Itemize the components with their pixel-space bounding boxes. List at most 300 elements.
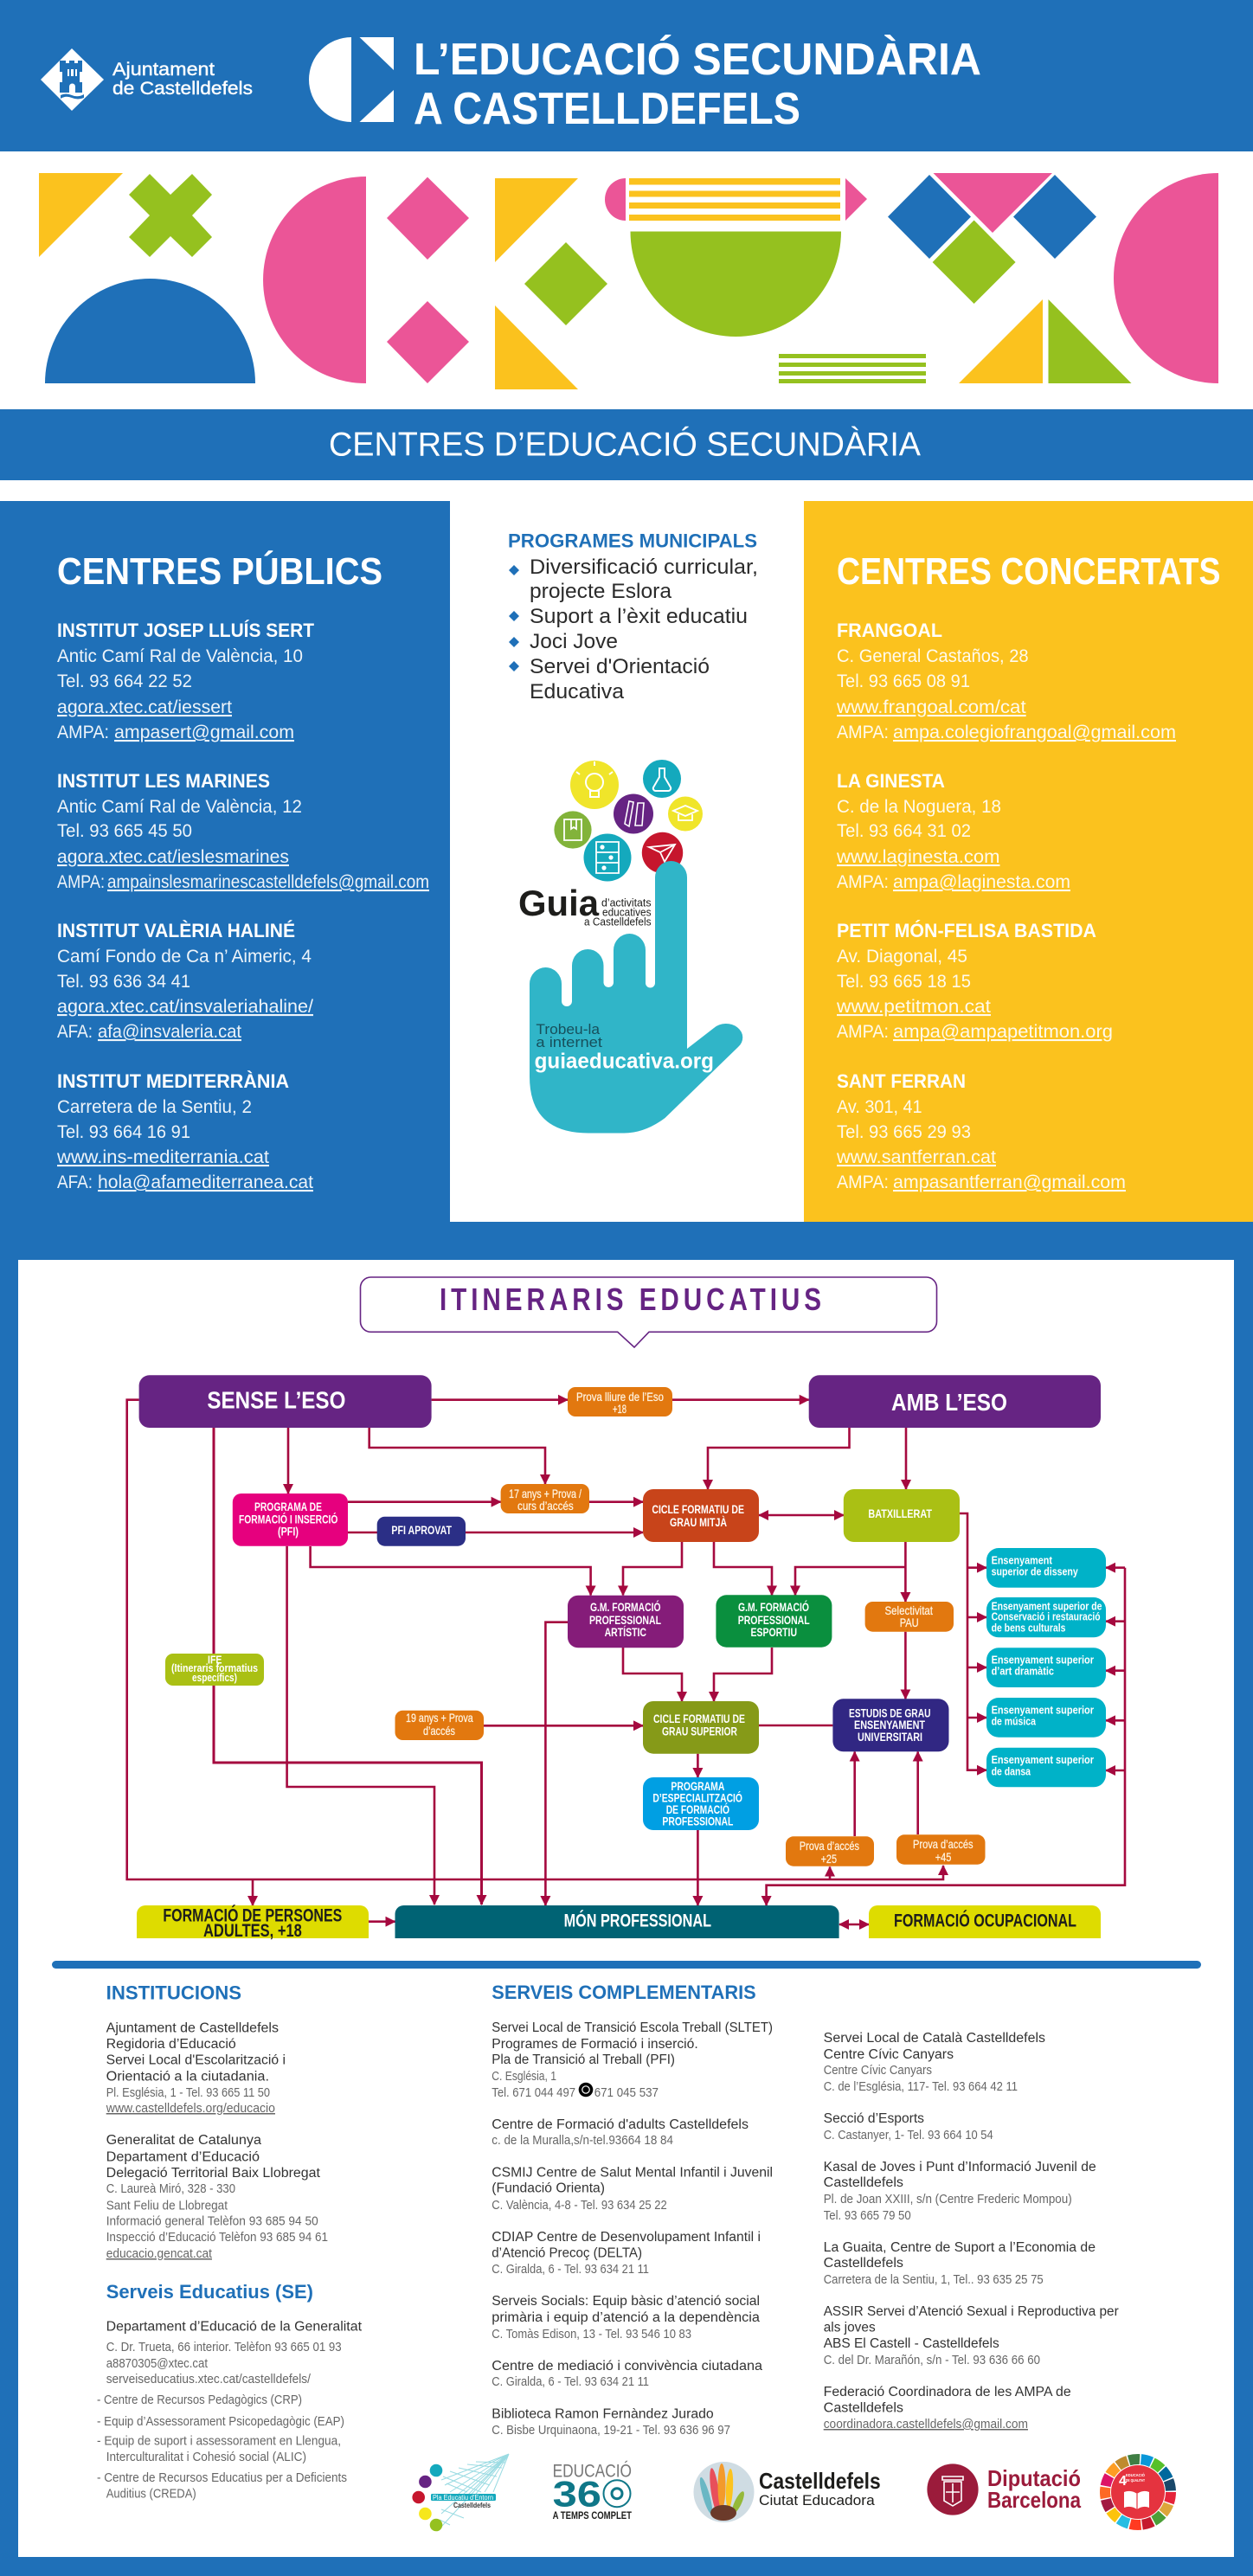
box: 19 anys + prova <box>395 1711 484 1740</box>
list of programmes: Educativa <box>530 680 625 703</box>
contact: Departament d'Educació de la Generalitat: serveiseducatius.xtec.cat/castelldefels/ <box>106 2372 312 2386</box>
service: federació AMPA: Castelldefels <box>824 2401 903 2416</box>
box: selectivitat PAU <box>865 1602 954 1632</box>
box: sense l'ESO <box>139 1375 432 1428</box>
school: Institut Josep Lluís Sert: agora.xtec.cat/iessert <box>57 697 232 717</box>
arrow: món professional and formació ocupacional <box>839 1924 869 1925</box>
service: kasal de joves <box>824 2160 1096 2223</box>
arrow: to música <box>967 1717 986 1718</box>
school: Frangoal: www.frangoal.com/cat <box>836 697 1026 717</box>
icon: light bulb <box>570 761 619 809</box>
logo: Castelldefels Ciutat Educadora <box>694 2462 881 2522</box>
box: PFI aprovat <box>377 1517 466 1546</box>
panel: programes municipals <box>508 530 758 703</box>
service: kasal de joves: Kasal de Joves i Punt d’Informació Juvenil de <box>824 2160 1096 2175</box>
school: Institut Valèria Haliné: agora.xtec.cat/insvaleriahaline/ <box>57 997 313 1017</box>
school: La Ginesta: AMPA: <box>837 872 889 892</box>
service: CDIAP: C. Giralda, 6 - Tel. 93 634 21 11 <box>492 2262 649 2277</box>
box: cicle formatiu de grau superior: GRAU SUPERIOR <box>662 1725 737 1738</box>
contact: Generalitat de Catalunya: Delegació Territorial Baix Llobregat <box>106 2166 321 2181</box>
arrow: sense ESO to prova lliure <box>432 1398 568 1401</box>
school: Institut Josep Lluís Sert: Antic Camí Ral de València, 10 <box>57 646 303 666</box>
guide wordmark: educatives <box>602 905 652 919</box>
box: música: de música <box>992 1715 1037 1728</box>
service: SLTET: 671 045 537 <box>594 2085 659 2100</box>
arrow: PFI to PFI aprovat <box>348 1532 377 1533</box>
arrow: ensenyaments superiors to món professional <box>767 1568 1125 1905</box>
arrow: sense ESO to PFI <box>287 1428 289 1494</box>
section: serveis complementaris <box>492 1982 1119 2438</box>
arrow: return to art dramàtic <box>1106 1669 1125 1672</box>
blue page background lower section <box>0 1222 1253 2576</box>
icon: graduation cap <box>668 796 703 831</box>
service: secció d'esports: Secció d’Esports <box>824 2111 924 2126</box>
service: kasal de joves: Tel. 93 665 79 50 <box>824 2208 911 2223</box>
box: art dramàtic <box>986 1648 1106 1687</box>
arrow: selectivitat to estudis de grau <box>904 1632 907 1699</box>
heading: programes municipals: PROGRAMES MUNICIPALS <box>508 530 757 552</box>
contact: Ajuntament de Castelldefels: Orientació a la ciutadania. <box>106 2070 269 2084</box>
arrow: cicle mitjà to GM artístic <box>623 1542 682 1596</box>
contact: Generalitat de Catalunya: C. Laureà Miró, 328 - 330 <box>106 2181 235 2196</box>
box: prova lliure de l'ESO: +18 <box>613 1402 626 1416</box>
service: la guaita: Castelldefels <box>824 2256 903 2271</box>
box: programa d'especialització: D’ESPECIALITZACIÓ <box>652 1791 742 1804</box>
contact: Generalitat de Catalunya <box>106 2133 328 2261</box>
school: Institut Les Marines: AMPA: <box>57 872 105 892</box>
section divider <box>52 1961 1201 1969</box>
box: conservació i restauració: de bens culturals <box>992 1621 1066 1634</box>
arrow: line to prova +25 <box>829 1867 831 1879</box>
box: GM formació professional esportiu: ESPORTIU <box>751 1626 797 1639</box>
contact: Departament d'Educació de la Generalitat: Auditius (CREDA) <box>106 2487 196 2501</box>
box: PFI: FORMACIÓ I INSERCIÓ <box>239 1513 337 1526</box>
contact: Departament d'Educació de la Generalitat <box>97 2319 363 2501</box>
school: Sant Ferran: Av. 301, 41 <box>837 1097 922 1117</box>
arrow: cicle mitjà and batxillerat <box>759 1514 844 1516</box>
box: món professional: MÓN PROFESSIONAL <box>564 1911 711 1931</box>
service: ASSIR: ABS El Castell - Castelldefels <box>824 2336 999 2351</box>
service: servei local de català: Centre Cívic Canyars <box>824 2063 932 2078</box>
box: batxillerat: BATXILLERAT <box>868 1507 933 1520</box>
logo: Diputació Barcelona: Diputació <box>987 2465 1081 2491</box>
arrow: cicle superior to programa d'especialització <box>697 1754 699 1777</box>
service: serveis socials: primària i equip d’atenció a la dependència <box>492 2310 760 2325</box>
service: centre de formació d'adults: c. de la Muralla,s/n-tel.93664 18 84 <box>492 2133 673 2148</box>
icon: book <box>554 811 592 849</box>
school: Institut Les Marines: ampainslesmarinescastelldefels@gmail.com <box>107 872 429 892</box>
service: CSMIJ: C. València, 4-8 - Tel. 93 634 25 22 <box>492 2198 667 2213</box>
contact: Departament d'Educació de la Generalitat: Interculturalitat i Cohesió social (ALIC) <box>106 2450 306 2464</box>
logo: Pla Educatiu d'Entorn: Castelldefels <box>453 2502 491 2509</box>
school: Sant Ferran: ampasantferran@gmail.com <box>893 1172 1126 1192</box>
school: Institut Les Marines: agora.xtec.cat/ieslesmarines <box>57 847 289 867</box>
contact: Departament d'Educació de la Generalitat: - Centre de Recursos Educatius per a Deficients <box>97 2470 347 2485</box>
box: dansa: de dansa <box>992 1765 1031 1778</box>
box: formació ocupacional <box>869 1905 1101 1938</box>
box: amb l'ESO: AMB L’ESO <box>891 1389 1007 1416</box>
flowchart: itineraris educatius <box>127 1277 1125 1941</box>
title <box>414 35 981 134</box>
box: conservació i restauració <box>986 1597 1106 1637</box>
school: Frangoal: Tel. 93 665 08 91 <box>837 671 970 691</box>
box: ensenyament superior de disseny: superior de disseny <box>992 1565 1078 1578</box>
panel: centres públics <box>0 501 450 1222</box>
logo: SDG 4 quality education <box>1091 2445 1185 2539</box>
service: serveis socials: Serveis Socials: Equip bàsic d’atenció social <box>492 2294 760 2309</box>
service: ASSIR: C. del Dr. Marañón, s/n - Tel. 93 636 66 60 <box>824 2353 1040 2367</box>
service: centre de formació d'adults: Centre de Formació d'adults Castelldefels <box>492 2117 749 2132</box>
box: GM formació professional esportiu: G.M. FORMACIÓ <box>738 1601 809 1614</box>
arrow: GM artístic to món professional <box>545 1622 568 1905</box>
box: món professional <box>395 1905 839 1938</box>
school: Institut Mediterrània: Tel. 93 664 16 91 <box>57 1122 190 1142</box>
service: SLTET: Servei Local de Transició Escola Treball (SLTET) <box>492 2020 773 2035</box>
school: Institut Mediterrània: hola@afamediterranea.cat <box>98 1172 313 1192</box>
section band: Centres d'educació secundària: CENTRES D’EDUCACIÓ SECUNDÀRIA <box>329 426 921 464</box>
contact: Ajuntament de Castelldefels: Servei Local d'Escolarització i <box>106 2053 286 2068</box>
box: PFI aprovat: PFI APROVAT <box>391 1524 453 1537</box>
arrow: return to conservació <box>1106 1620 1125 1622</box>
arrow: line to formació de persones adultes <box>252 1879 254 1905</box>
box: prova lliure de l'ESO: Prova lliure de l’Eso <box>576 1390 664 1404</box>
logo: Educació 360: EDUCACIÓ <box>553 2462 632 2482</box>
contact: Departament d'Educació de la Generalitat: - Equip de suport i assessorament en Llengua, <box>97 2434 341 2449</box>
service: ASSIR: als joves <box>824 2321 876 2335</box>
contact: Ajuntament de Castelldefels <box>106 2021 286 2116</box>
box: prova d'accés +45: +45 <box>935 1850 951 1864</box>
school: Institut Valèria Haliné: Camí Fondo de Ca n’ Aimeric, 4 <box>57 947 312 967</box>
arrow: PFI to 17 anys <box>348 1500 501 1503</box>
box: IFE: IFE <box>208 1654 222 1667</box>
box: música <box>986 1698 1106 1738</box>
arrow: batxillerat to GM esportiu <box>795 1567 905 1596</box>
school: Institut Les Marines: Antic Camí Ral de València, 12 <box>57 797 302 817</box>
service: secció d'esports <box>824 2111 993 2142</box>
school: La Ginesta: Tel. 93 664 31 02 <box>837 821 971 841</box>
box: GM formació professional esportiu <box>716 1595 832 1648</box>
box: PFI: PROGRAMA DE <box>254 1500 322 1513</box>
box: cicle formatiu de grau mitjà: CICLE FORMATIU DE <box>652 1503 744 1516</box>
school: Sant Ferran: SANT FERRAN <box>837 1070 966 1092</box>
box: ensenyament superior de disseny <box>986 1548 1106 1588</box>
guide wordmark: Guia <box>518 883 600 923</box>
title callout: itineraris educatius <box>360 1277 936 1347</box>
white content panel <box>18 1260 1234 2557</box>
icon: flask <box>643 760 681 798</box>
arrow: amb ESO to cicle mitjà <box>708 1428 850 1489</box>
box: formació de persones adultes: ADULTES, +18 <box>203 1921 302 1941</box>
service: biblioteca: Biblioteca Ramon Fernàndez Jurado <box>492 2407 714 2422</box>
contact: Ajuntament de Castelldefels: Pl. Església, 1 - Tel. 93 665 11 50 <box>106 2085 270 2100</box>
box: 17 anys + prova <box>501 1484 589 1513</box>
list of programmes: Diversificació curricular, <box>530 556 758 579</box>
service: servei local de català <box>824 2031 1045 2094</box>
service: SLTET: Tel. 671 044 497 <box>492 2085 575 2100</box>
arrow: cicle superior to estudis de grau <box>759 1725 832 1726</box>
box: amb l'ESO <box>809 1375 1101 1428</box>
box: prova d'accés +25: +25 <box>821 1852 837 1866</box>
service: federació AMPA: coordinadora.castelldefels@gmail.com <box>824 2417 1028 2431</box>
box: prova d'accés +45 <box>896 1834 985 1865</box>
box: formació de persones adultes: FORMACIÓ DE PERSONES <box>163 1905 342 1926</box>
box: música: Ensenyament superior <box>992 1704 1094 1717</box>
service: biblioteca: C. Bisbe Urquinaona, 19-21 - Tel. 93 636 96 97 <box>492 2423 730 2438</box>
arrow: prova lliure to amb ESO <box>672 1398 809 1401</box>
panel: centres concertats <box>804 501 1253 1222</box>
school: Petit Món-Felisa Bastida: Tel. 93 665 18 15 <box>837 972 971 992</box>
list of programmes: Suport a l’èxit educatiu <box>530 605 748 628</box>
arrow: prova +45 to estudis de grau <box>916 1751 919 1834</box>
logo: SDG 4 quality education: 4 <box>1119 2474 1127 2489</box>
list of programmes: Joci Jove <box>530 630 618 653</box>
contact: Generalitat de Catalunya: educacio.gencat.cat <box>106 2246 213 2261</box>
school: La Ginesta: C. de la Noguera, 18 <box>837 797 1001 817</box>
arrow: PFI to GM artístic <box>311 1546 591 1596</box>
box: dansa: Ensenyament superior <box>992 1753 1094 1766</box>
logo: Pla Educatiu d'Entorn: Pla Educatiu d'Entorn <box>433 2494 493 2502</box>
school: Institut Les Marines: Tel. 93 665 45 50 <box>57 821 192 841</box>
arrow: GM artístic to cicle superior <box>623 1648 682 1701</box>
box: programa d'especialització: DE FORMACIÓ <box>666 1803 729 1816</box>
school: Sant Ferran: AMPA: <box>837 1172 889 1192</box>
arrow: batxillerat to ensenyament superior de dansa <box>960 1513 986 1770</box>
service: centre de mediació: Centre de mediació i convivència ciutadana <box>492 2359 762 2374</box>
arrow: return to música <box>1106 1719 1125 1722</box>
contact: Generalitat de Catalunya: Departament d’Educació <box>106 2149 260 2165</box>
arrow: cicle mitjà to GM esportiu <box>714 1542 772 1596</box>
box: conservació i restauració: Conservació i restauració <box>992 1610 1101 1623</box>
Ajuntament wordmark: Ajuntament <box>112 60 215 80</box>
arrow: sense ESO to 17 anys <box>369 1428 545 1484</box>
box: selectivitat PAU: Selectivitat <box>884 1603 933 1617</box>
box: sense l'ESO: SENSE L’ESO <box>207 1387 345 1414</box>
arrow: to ensenyament superior de disseny <box>967 1566 986 1569</box>
service: secció d'esports: C. Castanyer, 1- Tel. 93 664 10 54 <box>824 2128 993 2142</box>
school: Frangoal <box>836 620 1176 742</box>
section: institucions <box>97 1982 363 2501</box>
icon: C logo <box>309 37 394 122</box>
box: estudis de grau: ENSENYAMENT <box>854 1718 926 1731</box>
school: Petit Món-Felisa Bastida: AMPA: <box>837 1022 889 1042</box>
school: Petit Món-Felisa Bastida: www.petitmon.cat <box>836 997 991 1017</box>
school: Institut Mediterrània: AFA: <box>57 1172 93 1192</box>
school: Institut Josep Lluís Sert: ampasert@gmail.com <box>114 723 294 742</box>
service: SLTET: C. Església, 1 <box>492 2069 556 2084</box>
box: 17 anys + prova: curs d’accés <box>517 1499 574 1513</box>
logo: SDG 4 quality education: DE QUALITAT <box>1126 2478 1145 2483</box>
icon: whatsapp <box>579 2083 593 2097</box>
contact: Generalitat de Catalunya: Inspecció d’Educació Telèfon 93 685 94 61 <box>106 2230 328 2245</box>
service: CDIAP: CDIAP Centre de Desenvolupament Infantil i <box>492 2230 761 2245</box>
box: cicle formatiu de grau mitjà <box>643 1489 759 1542</box>
box: selectivitat PAU: PAU <box>900 1616 919 1629</box>
guide wordmark: a Castelldefels <box>584 915 652 928</box>
arrow: amb ESO to batxillerat <box>905 1428 907 1489</box>
box: batxillerat <box>844 1489 960 1542</box>
arrow: to art dramàtic <box>967 1667 986 1668</box>
school: Institut Valèria Haliné: afa@insvaleria.cat <box>98 1022 241 1042</box>
school: La Ginesta: ampa@laginesta.com <box>893 872 1070 892</box>
heading: centres públics: CENTRES PÚBLICS <box>57 549 382 593</box>
arrow: return to dansa <box>1106 1770 1125 1771</box>
service: centre de mediació <box>492 2359 762 2389</box>
school: Institut Josep Lluís Sert: Tel. 93 664 22 52 <box>57 671 192 691</box>
title: L’EDUCACIÓ SECUNDÀRIA <box>414 35 981 85</box>
school: Institut Mediterrània: INSTITUT MEDITERRÀNIA <box>57 1070 289 1092</box>
service: centre de formació d'adults <box>492 2117 749 2148</box>
icon: pointing hand <box>530 861 742 1134</box>
service: ASSIR: ASSIR Servei d’Atenció Sexual i Reproductiva per <box>824 2304 1119 2319</box>
heading: serveis educatius: Serveis Educatius (SE) <box>106 2281 313 2303</box>
heading: institucions: INSTITUCIONS <box>106 1982 241 2004</box>
service: CSMIJ: (Fundació Orienta) <box>492 2181 605 2196</box>
school: Institut Josep Lluís Sert: AMPA: <box>57 723 109 742</box>
guide illustration: Guia d'activitats educatives <box>518 760 742 1134</box>
box: formació ocupacional: FORMACIÓ OCUPACIONAL <box>894 1911 1076 1931</box>
arrow: 17 anys to cicle mitjà <box>589 1500 643 1503</box>
service: SLTET: Pla de Transició al Treball (PFI) <box>492 2052 675 2067</box>
school: Institut Mediterrània <box>56 1070 313 1192</box>
guide web address <box>535 1021 714 1073</box>
icon: Ajuntament de Castelldefels crest <box>41 48 104 111</box>
box: IFE: específics) <box>192 1671 237 1684</box>
contact: Departament d'Educació de la Generalitat: a8870305@xtec.cat <box>106 2356 209 2371</box>
box: GM formació professional artístic: PROFESSIONAL <box>589 1614 661 1627</box>
box: art dramàtic: Ensenyament superior <box>992 1654 1094 1667</box>
school: Institut Mediterrània: www.ins-mediterrania.cat <box>56 1147 269 1167</box>
box: 19 anys + prova: 19 anys + Prova <box>406 1711 473 1725</box>
arrow: sense ESO to prova +45 <box>127 1400 943 1879</box>
arrow: persones adultes to món professional <box>369 1920 395 1923</box>
Ajuntament wordmark: de Castelldefels <box>112 79 253 99</box>
service: serveis socials <box>492 2294 760 2342</box>
contact: Departament d'Educació de la Generalitat: C. Dr. Trueta, 66 interior. Telèfon 93 665 01 93 <box>106 2340 342 2354</box>
guide web address: guiaeducativa.org <box>535 1049 714 1073</box>
service: servei local de català: Servei Local de Català Castelldefels <box>824 2031 1045 2046</box>
school: Frangoal: FRANGOAL <box>837 620 942 641</box>
box: cicle formatiu de grau mitjà: GRAU MITJÀ <box>670 1516 727 1529</box>
contact: Ajuntament de Castelldefels: www.castelldefels.org/educacio <box>106 2101 275 2116</box>
school: Frangoal: AMPA: <box>837 723 889 742</box>
service: CDIAP <box>492 2230 761 2277</box>
logo: Diputació Barcelona <box>927 2464 1081 2515</box>
arrow: prova +25 to estudis de grau <box>853 1751 856 1836</box>
guide web address: a internet <box>536 1034 602 1050</box>
service: serveis socials: C. Tomàs Edison, 13 - Tel. 93 546 10 83 <box>492 2327 691 2342</box>
box: GM formació professional artístic <box>568 1596 684 1648</box>
logo: Educació 360: 36 <box>553 2474 601 2515</box>
logo: SDG 4 quality education: EDUCACIÓ <box>1126 2471 1145 2477</box>
service: biblioteca <box>492 2407 730 2438</box>
school: Institut Mediterrània: Carretera de la Sentiu, 2 <box>57 1097 252 1117</box>
arrow: programa d'especialització to món professional <box>697 1830 699 1905</box>
service: centre de mediació: C. Giralda, 6 - Tel. 93 634 21 11 <box>492 2374 649 2389</box>
logo: Castelldefels Ciutat Educadora: Ciutat Educadora <box>759 2492 875 2509</box>
school: Institut Josep Lluís Sert <box>57 620 315 742</box>
school: Institut Valèria Haliné: AFA: <box>57 1022 93 1042</box>
service: CSMIJ: CSMIJ Centre de Salut Mental Infantil i Juvenil <box>492 2166 773 2181</box>
icon: paper plane <box>642 832 683 873</box>
arrow: GM esportiu to cicle superior <box>714 1648 772 1701</box>
icon: pencil and ruler <box>614 794 653 834</box>
school: Frangoal: C. General Castaños, 28 <box>837 646 1029 666</box>
list of programmes <box>509 556 758 703</box>
box: prova d'accés +25: Prova d’accés <box>800 1839 859 1853</box>
service: la guaita: Carretera de la Sentiu, 1, Tel.. 93 635 25 75 <box>824 2272 1044 2287</box>
service: kasal de joves: Castelldefels <box>824 2175 903 2190</box>
service: CDIAP: d’Atenció Precoç (DELTA) <box>492 2246 642 2261</box>
service: CSMIJ <box>492 2166 773 2213</box>
box: estudis de grau: ESTUDIS DE GRAU <box>849 1707 931 1720</box>
arrow: sense ESO to IFE <box>213 1428 215 1654</box>
school: La Ginesta <box>836 770 1070 892</box>
box: estudis de grau <box>832 1699 948 1751</box>
service: la guaita: La Guaita, Centre de Suport a l’Economia de <box>824 2240 1096 2255</box>
logo: Educació 360 <box>553 2462 633 2521</box>
school: Petit Món-Felisa Bastida: PETIT MÓN-FELISA BASTIDA <box>837 920 1096 941</box>
title: A CASTELLDEFELS <box>414 84 800 134</box>
arrow: PFI to món professional <box>287 1546 434 1905</box>
service: ASSIR <box>824 2304 1119 2367</box>
title callout: itineraris educatius: ITINERARIS EDUCATIUS <box>440 1282 826 1317</box>
school: Petit Món-Felisa Bastida: ampa@ampapetitmon.org <box>893 1022 1113 1042</box>
arrow: return to disseny <box>1106 1566 1125 1569</box>
box: art dramàtic: d’art dramàtic <box>992 1665 1054 1678</box>
heading: serveis complementaris: SERVEIS COMPLEMENTARIS <box>492 1982 756 2003</box>
school: Sant Ferran <box>836 1070 1126 1192</box>
icon: abacus <box>583 834 632 881</box>
box: prova d'accés +45: Prova d’accés <box>913 1837 973 1851</box>
guide wordmark: d’activitats <box>601 896 652 909</box>
service: la guaita <box>824 2240 1096 2287</box>
service: SLTET <box>492 2020 773 2100</box>
box: cicle formatiu de grau superior <box>643 1701 759 1754</box>
contact: Generalitat de Catalunya: Informació general Telèfon 93 685 94 50 <box>106 2213 318 2228</box>
section band: Centres d'educació secundària <box>0 409 1253 480</box>
arrow: to conservació i restauració <box>967 1616 986 1618</box>
connector arrows <box>127 1400 1125 1924</box>
header band <box>0 0 1253 151</box>
box: PFI <box>233 1494 348 1546</box>
service: servei local de català: C. de l’Església, 117- Tel. 93 664 42 11 <box>824 2079 1018 2094</box>
logo: Diputació Barcelona: Barcelona <box>987 2487 1081 2513</box>
school: Sant Ferran: www.santferran.cat <box>836 1147 996 1167</box>
box: dansa <box>986 1748 1106 1787</box>
box: GM formació professional artístic: ARTÍSTIC <box>605 1626 646 1639</box>
box: IFE <box>165 1654 264 1686</box>
contact: Departament d'Educació de la Generalitat: - Centre de Recursos Pedagògics (CRP) <box>97 2393 302 2407</box>
list of programmes: projecte Eslora <box>530 580 672 603</box>
school: La Ginesta: www.laginesta.com <box>836 847 1000 867</box>
arrow: batxillerat to selectivitat <box>904 1542 907 1602</box>
box: GM formació professional artístic: G.M. FORMACIÓ <box>590 1601 661 1614</box>
school: Frangoal: ampa.colegiofrangoal@gmail.com <box>893 723 1176 742</box>
box: prova d'accés +25 <box>786 1836 874 1866</box>
arrow: 19 anys to cicle superior <box>484 1725 643 1727</box>
box: programa d'especialització: PROGRAMA <box>671 1780 725 1793</box>
school: Institut Valèria Haliné <box>57 920 313 1042</box>
box: formació de persones adultes <box>137 1905 369 1941</box>
school: Institut Valèria Haliné: Tel. 93 636 34 41 <box>57 972 190 992</box>
service: federació AMPA <box>824 2385 1071 2431</box>
school: La Ginesta: LA GINESTA <box>837 770 945 792</box>
box: IFE: (Itineraris formatius <box>171 1661 258 1674</box>
service: SLTET: Programes de Formació i inserció. <box>492 2037 698 2052</box>
school: Institut Josep Lluís Sert: INSTITUT JOSEP LLUÍS SERT <box>57 620 315 641</box>
Ajuntament wordmark <box>112 60 253 99</box>
box: prova lliure de l'ESO <box>568 1387 672 1416</box>
